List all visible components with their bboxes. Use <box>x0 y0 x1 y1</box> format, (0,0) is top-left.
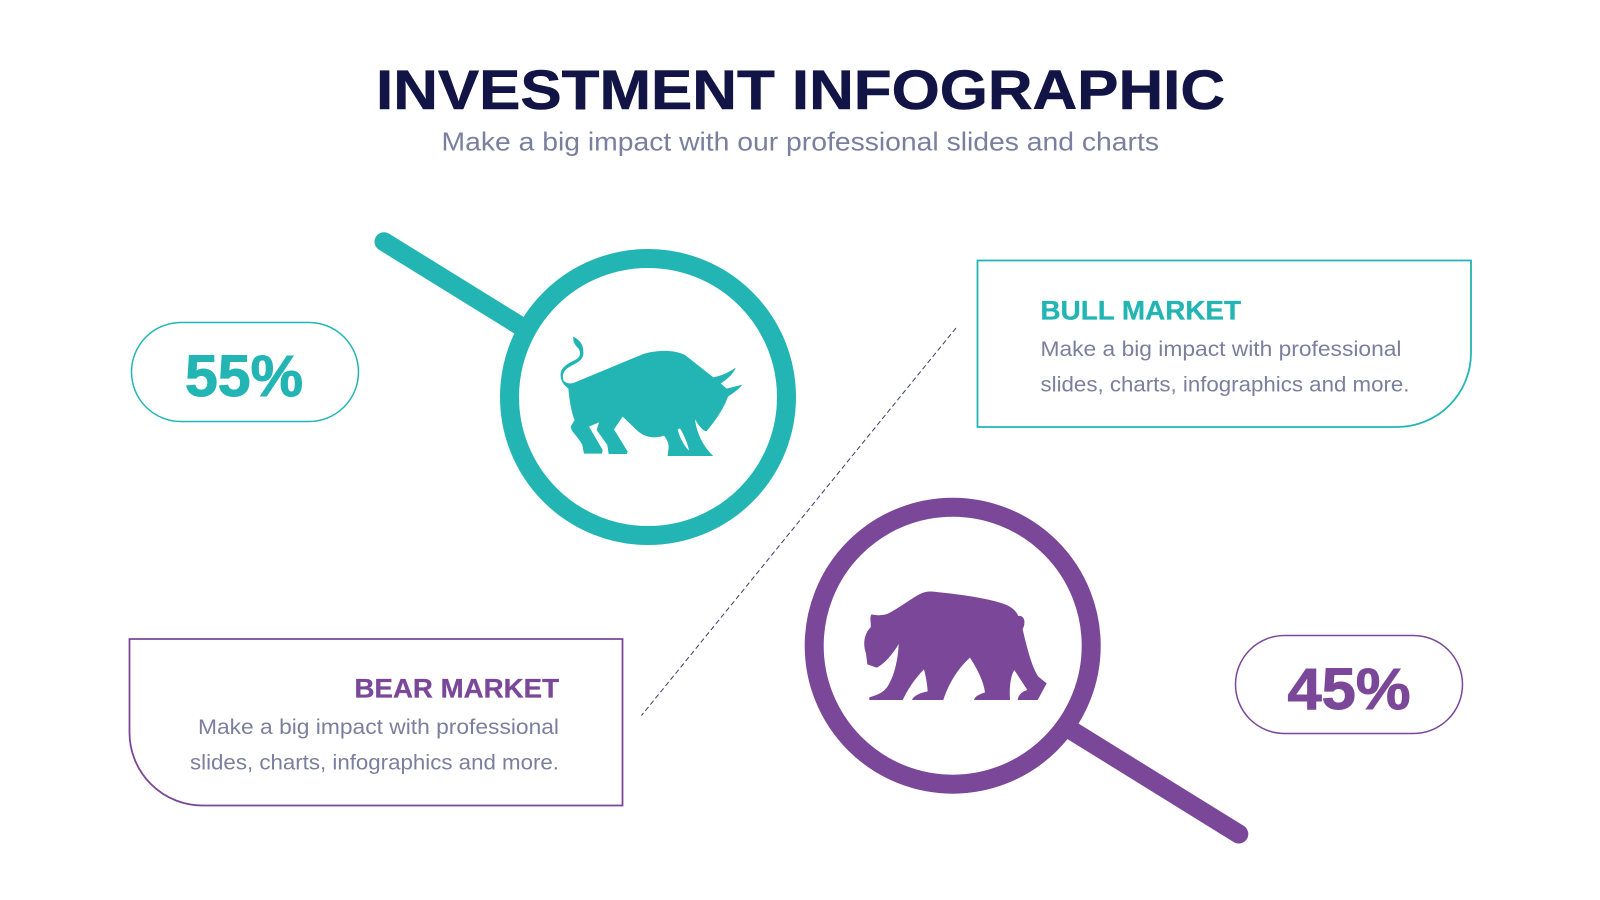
panel: bull market <box>978 260 1471 427</box>
heading: bear market: BEAR MARKET <box>354 674 559 704</box>
panel: bear market <box>130 639 622 806</box>
text: bull description: Make a big impact with professional <box>1040 337 1402 361</box>
text: bear description: slides, charts, infographics and more. <box>190 750 559 774</box>
icon: purple magnifying glass with bear <box>814 507 1239 834</box>
magnifier handle <box>1066 727 1239 834</box>
icon: bull <box>561 337 743 456</box>
text: bull description: slides, charts, infographics and more. <box>1040 372 1410 396</box>
value: 55%: 55% <box>185 344 303 409</box>
icon: bear <box>864 591 1047 700</box>
title: INVESTMENT INFOGRAPHIC <box>376 58 1225 121</box>
panel: bull percentage pill <box>132 322 358 422</box>
icon: teal magnifying glass with bull <box>384 242 786 535</box>
magnifier ring <box>814 507 1091 784</box>
subtitle: Make a big impact with our professional slides and charts <box>442 126 1159 156</box>
text: bear description: Make a big impact with professional <box>198 715 559 739</box>
magnifier handle <box>384 242 530 332</box>
dashed divider <box>642 328 956 716</box>
text: bull description <box>1040 337 1410 396</box>
panel: bear percentage pill <box>1236 636 1462 734</box>
value: 45%: 45% <box>1288 657 1410 722</box>
text: bear description <box>190 715 559 774</box>
heading: bull market: BULL MARKET <box>1040 296 1241 326</box>
magnifier ring <box>510 258 786 536</box>
